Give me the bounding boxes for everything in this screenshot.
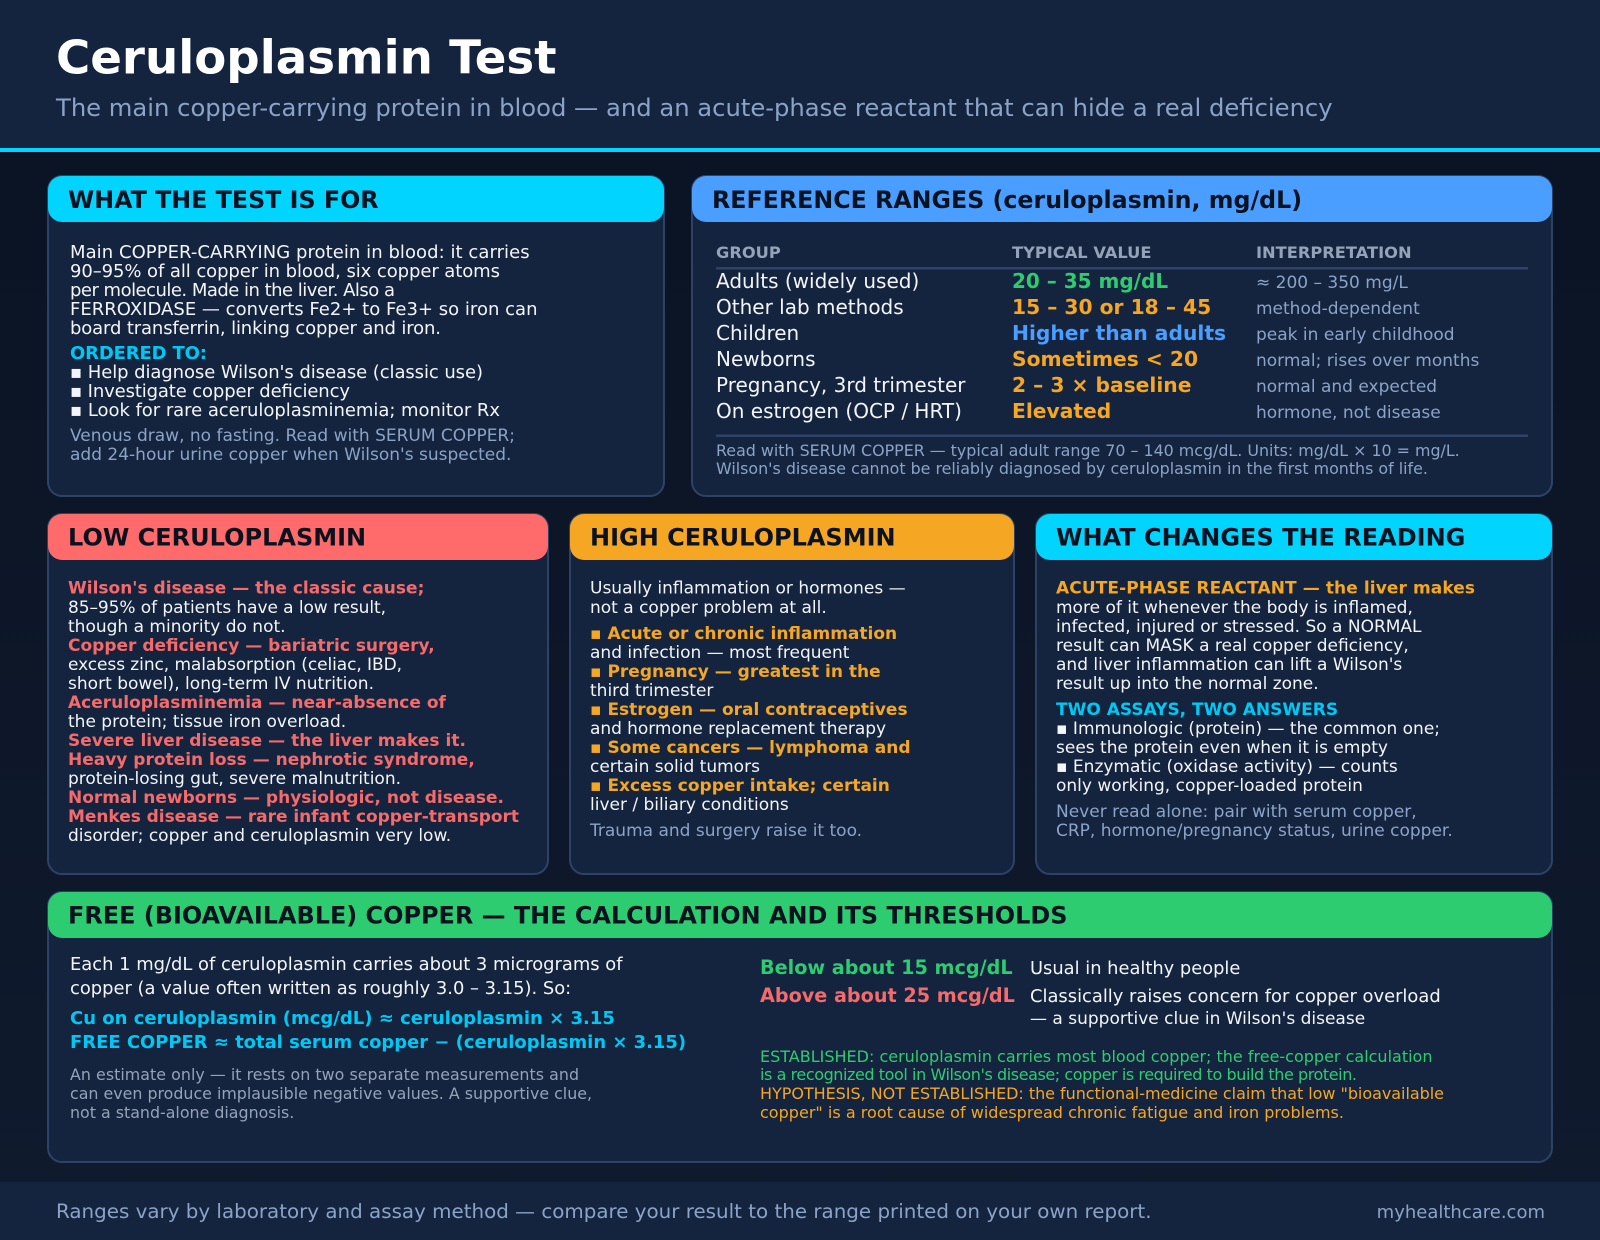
text: intro bbox=[590, 579, 906, 618]
text: causes of low: Copper deficiency — bariatric surgery, bbox=[68, 636, 435, 656]
table: reference ranges: INTERPRETATION bbox=[1256, 243, 1412, 262]
text: high footnote: Trauma and surgery raise it too. bbox=[589, 821, 862, 841]
list: causes of high: third trimester bbox=[590, 681, 713, 701]
table: reference ranges: TYPICAL VALUE bbox=[1012, 243, 1151, 262]
text: established vs hypothesis bbox=[760, 1047, 1444, 1122]
text: description: per molecule. Made in the liver. Also a bbox=[70, 280, 395, 301]
text: sampling note bbox=[70, 426, 515, 465]
text: causes of low: protein-losing gut, severe malnutrition. bbox=[68, 769, 401, 789]
list: causes of high bbox=[590, 624, 911, 815]
text: intro: not a copper problem at all. bbox=[590, 598, 827, 618]
subtitle: The main copper-carrying protein in blood — and an acute-phase reactant that can hide a real deficiency bbox=[55, 93, 1333, 122]
table: reference ranges: Sometimes < 20 bbox=[1012, 347, 1198, 371]
formulas: Cu on ceruloplasmin (mcg/dL) ≈ ceruloplasmin × 3.15 bbox=[70, 1008, 615, 1029]
list: causes of high: and infection — most frequent bbox=[590, 643, 850, 663]
text: table note: Wilson's disease cannot be reliably diagnosed by ceruloplasmin in the first months of life. bbox=[716, 459, 1428, 478]
footer note: Ranges vary by laboratory and assay method — compare your result to the range printed on your own report. bbox=[56, 1200, 1152, 1223]
text: causes of low: the protein; tissue iron overload. bbox=[68, 712, 346, 732]
text: description: board transferrin, linking copper and iron. bbox=[70, 318, 441, 339]
text: two assays: ▪ Immunologic (protein) — the common one; bbox=[1056, 719, 1440, 739]
list: causes of high: liver / biliary conditions bbox=[590, 795, 789, 815]
text: two assays: TWO ASSAYS, TWO ANSWERS bbox=[1056, 700, 1338, 720]
list: causes of high: ▪ Acute or chronic inflammation bbox=[590, 624, 897, 644]
thresholds bbox=[760, 956, 1441, 1029]
heading: what the test is for: WHAT THE TEST IS FOR bbox=[68, 186, 379, 214]
text: description: 90–95% of all copper in blood, six copper atoms bbox=[70, 261, 500, 282]
table: reference ranges: normal; rises over months bbox=[1256, 351, 1479, 371]
table: reference ranges: Adults (widely used) bbox=[716, 269, 919, 293]
text: causes of low: short bowel), long-term IV nutrition. bbox=[68, 674, 374, 694]
text: description bbox=[70, 242, 538, 339]
panel: high ceruloplasmin bbox=[570, 514, 1014, 874]
text: calculation intro bbox=[70, 954, 623, 999]
text: description: FERROXIDASE — converts Fe2+ to Fe3+ so iron can bbox=[70, 299, 538, 320]
text: acute-phase reactant: result can MASK a real copper deficiency, bbox=[1056, 636, 1409, 656]
title: Ceruloplasmin Test bbox=[56, 32, 557, 86]
table: reference ranges: method-dependent bbox=[1256, 299, 1420, 319]
table: reference ranges: 15 – 30 or 18 – 45 bbox=[1012, 295, 1211, 319]
text: sampling note: add 24-hour urine copper when Wilson's suspected. bbox=[70, 445, 511, 465]
formulas bbox=[70, 1008, 686, 1053]
text: two assays: only working, copper-loaded protein bbox=[1056, 776, 1363, 796]
text: calculation intro: copper (a value often written as roughly 3.0 – 3.15). So: bbox=[70, 978, 571, 999]
list: causes of high: ▪ Estrogen — oral contraceptives bbox=[590, 700, 908, 720]
formulas: FREE COPPER ≈ total serum copper − (ceruloplasmin × 3.15) bbox=[70, 1032, 686, 1053]
table: reference ranges: Newborns bbox=[716, 347, 816, 371]
text: causes of low: Normal newborns — physiologic, not disease. bbox=[68, 788, 504, 808]
text: pairing note bbox=[1056, 802, 1453, 841]
text: ordered to list: ▪ Help diagnose Wilson's disease (classic use) bbox=[70, 362, 483, 383]
table: reference ranges: ≈ 200 – 350 mg/L bbox=[1256, 273, 1408, 293]
text: causes of low: excess zinc, malabsorption (celiac, IBD, bbox=[68, 655, 402, 675]
text: causes of low: Heavy protein loss — nephrotic syndrome, bbox=[68, 750, 475, 770]
text: acute-phase reactant: infected, injured or stressed. So a NORMAL bbox=[1056, 617, 1422, 637]
table: reference ranges: peak in early childhood bbox=[1256, 325, 1455, 345]
table: reference ranges: normal and expected bbox=[1256, 377, 1437, 397]
heading: low ceruloplasmin bbox=[48, 514, 548, 560]
table: reference ranges: hormone, not disease bbox=[1256, 403, 1441, 423]
text: acute-phase reactant: ACUTE-PHASE REACTANT — the liver makes bbox=[1056, 579, 1475, 599]
text: estimate caveat: An estimate only — it rests on two separate measurements and bbox=[70, 1065, 579, 1084]
table: reference ranges: GROUP bbox=[716, 243, 781, 262]
footer site: myhealthcare.com bbox=[1377, 1202, 1545, 1223]
heading: high ceruloplasmin bbox=[570, 514, 1014, 560]
text: acute-phase reactant: and liver inflammation can lift a Wilson's bbox=[1056, 655, 1402, 675]
heading: what changes the reading: WHAT CHANGES THE READING bbox=[1056, 524, 1465, 552]
list: causes of high: ▪ Some cancers — lymphoma and bbox=[590, 738, 911, 758]
header band bbox=[0, 0, 1600, 152]
text: causes of low: disorder; copper and ceruloplasmin very low. bbox=[68, 826, 451, 846]
list: causes of high: ▪ Pregnancy — greatest in the bbox=[590, 662, 881, 682]
table: reference ranges: Other lab methods bbox=[716, 295, 904, 319]
text: ordered to list: ▪ Investigate copper deficiency bbox=[70, 381, 350, 402]
table: reference ranges: On estrogen (OCP / HRT) bbox=[716, 399, 962, 423]
text: ordered to list: ORDERED TO: bbox=[70, 343, 207, 364]
table: reference ranges bbox=[716, 243, 1528, 437]
panel: free copper bbox=[48, 892, 1552, 1162]
heading: what the test is for bbox=[48, 176, 664, 222]
text: estimate caveat: can even produce implausible negative values. A supportive clue, bbox=[70, 1084, 592, 1103]
text: intro: Usually inflammation or hormones — bbox=[590, 579, 906, 599]
text: causes of low bbox=[68, 579, 519, 846]
text: ordered to list: ▪ Look for rare aceruloplasminemia; monitor Rx bbox=[70, 400, 500, 421]
heading: what changes the reading bbox=[1036, 514, 1552, 560]
panel: reference ranges bbox=[692, 176, 1552, 496]
list: causes of high: ▪ Excess copper intake; certain bbox=[590, 776, 890, 796]
heading: free copper: FREE (BIOAVAILABLE) COPPER — THE CALCULATION AND ITS THRESHOLDS bbox=[68, 902, 1067, 930]
list: causes of high: certain solid tumors bbox=[590, 757, 760, 777]
panel: what changes the reading bbox=[1036, 514, 1552, 874]
thresholds: Usual in healthy people bbox=[1030, 958, 1240, 979]
text: pairing note: CRP, hormone/pregnancy status, urine copper. bbox=[1056, 821, 1453, 841]
text: description: Main COPPER-CARRYING protein in blood: it carries bbox=[70, 242, 530, 263]
thresholds: Above about 25 mcg/dL bbox=[760, 984, 1015, 1007]
heading: low ceruloplasmin: LOW CERULOPLASMIN bbox=[68, 524, 366, 552]
table: reference ranges: Pregnancy, 3rd trimester bbox=[716, 373, 966, 397]
text: causes of low: Aceruloplasminemia — near-absence of bbox=[68, 693, 447, 713]
heading: reference ranges: REFERENCE RANGES (ceruloplasmin, mg/dL) bbox=[712, 186, 1302, 214]
text: causes of low: though a minority do not. bbox=[68, 617, 286, 637]
text: calculation intro: Each 1 mg/dL of ceruloplasmin carries about 3 micrograms of bbox=[70, 954, 623, 975]
thresholds: Classically raises concern for copper overload bbox=[1030, 986, 1441, 1007]
text: sampling note: Venous draw, no fasting. Read with SERUM COPPER; bbox=[70, 426, 515, 446]
text: causes of low: 85–95% of patients have a low result, bbox=[68, 598, 386, 618]
table: reference ranges: Higher than adults bbox=[1012, 321, 1226, 345]
table: reference ranges: 2 – 3 × baseline bbox=[1012, 373, 1191, 397]
text: acute-phase reactant: more of it whenever the body is inflamed, bbox=[1056, 598, 1413, 618]
table: reference ranges: 20 – 35 mg/dL bbox=[1012, 269, 1168, 293]
table: reference ranges: Elevated bbox=[1012, 399, 1111, 423]
text: table note bbox=[716, 441, 1460, 478]
heading: high ceruloplasmin: HIGH CERULOPLASMIN bbox=[590, 524, 896, 552]
text: established vs hypothesis: is a recognized tool in Wilson's disease; copper is required to build the protein. bbox=[760, 1065, 1357, 1084]
list: causes of high: and hormone replacement therapy bbox=[590, 719, 886, 739]
table: reference ranges: Children bbox=[716, 321, 799, 345]
text: two assays: sees the protein even when it is empty bbox=[1056, 738, 1388, 758]
text: estimate caveat: not a stand-alone diagnosis. bbox=[70, 1103, 294, 1122]
text: two assays: ▪ Enzymatic (oxidase activity) — counts bbox=[1056, 757, 1398, 777]
footer band bbox=[0, 1182, 1600, 1240]
text: acute-phase reactant bbox=[1056, 579, 1475, 694]
thresholds: — a supportive clue in Wilson's disease bbox=[1030, 1009, 1365, 1029]
text: established vs hypothesis: HYPOTHESIS, NOT ESTABLISHED: the functional-medicine claim that low "bioavailable bbox=[760, 1084, 1444, 1103]
heading: reference ranges bbox=[692, 176, 1552, 222]
thresholds: Below about 15 mcg/dL bbox=[760, 956, 1013, 979]
text: pairing note: Never read alone: pair with serum copper, bbox=[1056, 802, 1417, 822]
text: acute-phase reactant: result up into the normal zone. bbox=[1056, 674, 1319, 694]
text: established vs hypothesis: ESTABLISHED: ceruloplasmin carries most blood copper; the free-copper calculation bbox=[760, 1047, 1432, 1066]
text: estimate caveat bbox=[70, 1065, 592, 1122]
text: causes of low: Severe liver disease — the liver makes it. bbox=[68, 731, 466, 751]
heading: free copper bbox=[48, 892, 1552, 938]
text: table note: Read with SERUM COPPER — typical adult range 70 – 140 mcg/dL. Units: mg/dL × 10 = mg/L. bbox=[716, 441, 1460, 460]
text: two assays bbox=[1056, 700, 1440, 796]
text: established vs hypothesis: copper" is a root cause of widespread chronic fatigue and iron problems. bbox=[760, 1103, 1344, 1122]
panel: what the test is for bbox=[48, 176, 664, 496]
text: ordered to list bbox=[70, 343, 500, 421]
text: causes of low: Menkes disease — rare infant copper-transport bbox=[68, 807, 519, 827]
text: causes of low: Wilson's disease — the classic cause; bbox=[68, 579, 424, 599]
panel: low ceruloplasmin bbox=[48, 514, 548, 874]
